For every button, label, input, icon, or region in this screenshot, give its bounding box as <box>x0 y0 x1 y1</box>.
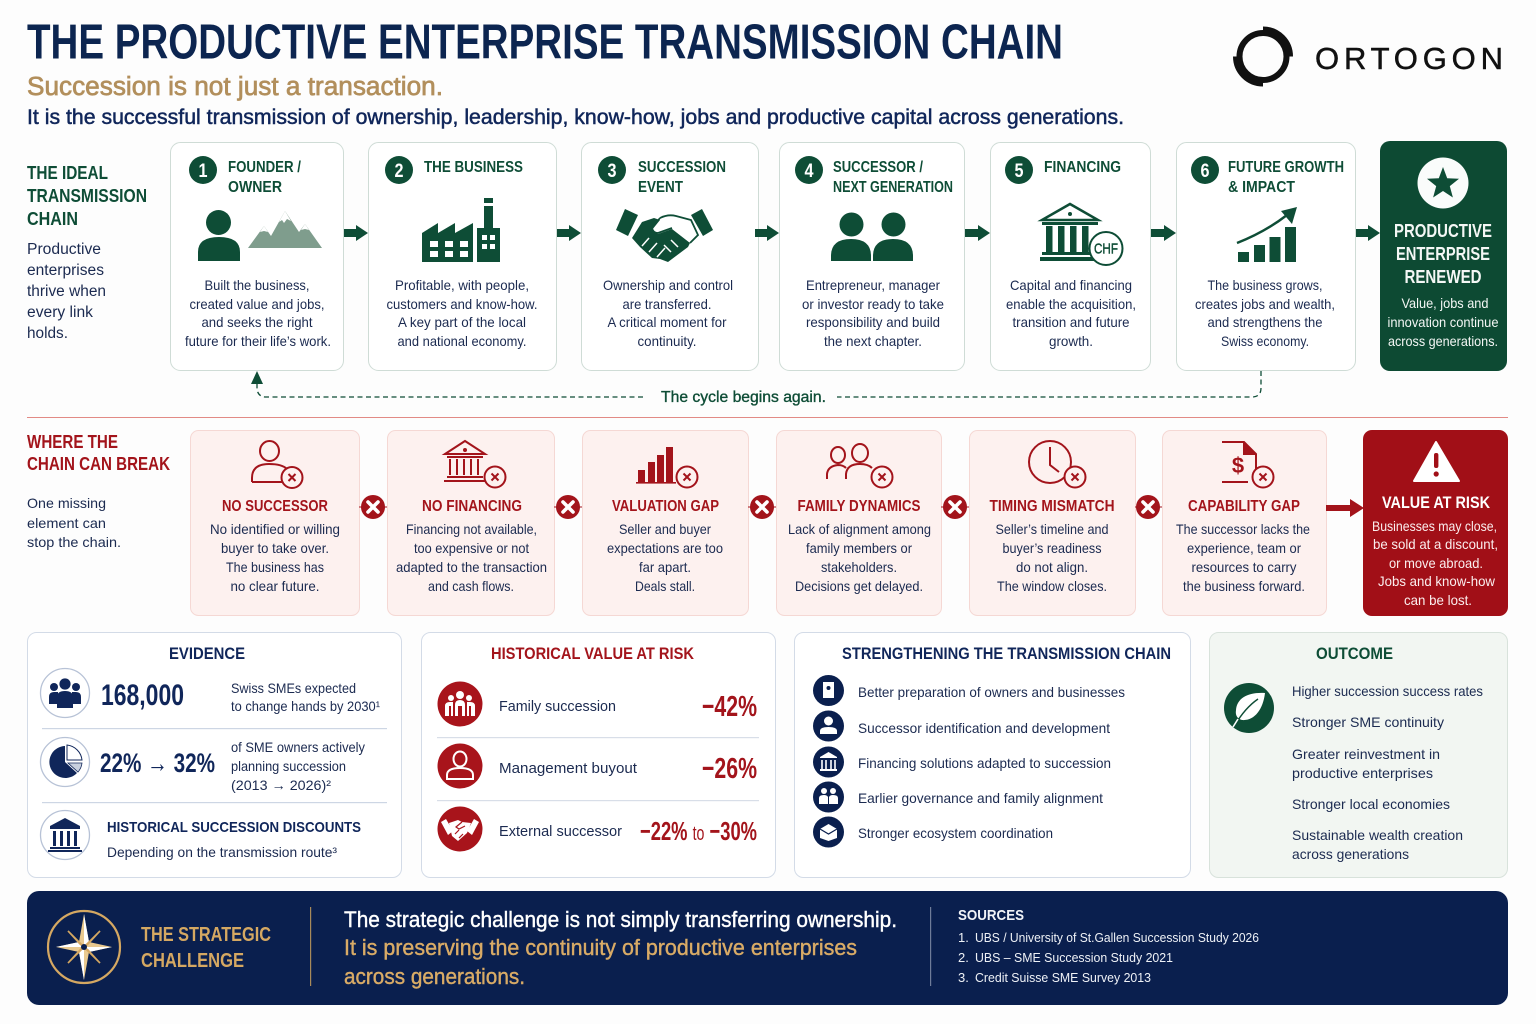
banner: strategic challenge <box>27 891 1508 1005</box>
icon: handshake <box>616 209 713 262</box>
section label: where the chain can break: CHAIN CAN BREAK <box>27 454 170 474</box>
subtitle: Succession is not just a transaction. <box>27 73 443 101</box>
break card 4: family dynamics: family members or <box>806 540 912 556</box>
icon: star badge <box>1418 158 1468 208</box>
section label: the ideal transmission chain: every link <box>27 304 93 321</box>
sources: UBS – SME Succession Study 2021 <box>975 950 1173 965</box>
arrow <box>557 225 581 241</box>
row: family succession: −42% <box>702 691 757 723</box>
list: outcomes: across generations <box>1292 846 1409 862</box>
panel: historical value at risk <box>422 632 776 878</box>
break card 6: capability gap: CAPABILITY GAP <box>1188 498 1300 515</box>
stat: 168,000 SMEs <box>101 679 380 714</box>
break card 4: family dynamics <box>776 430 942 616</box>
stat: 168,000 SMEs: to change hands by 2030¹ <box>231 698 380 714</box>
card: productive enterprise renewed: PRODUCTIVE <box>1394 221 1492 241</box>
break card 6: capability gap: The successor lacks the <box>1176 521 1310 537</box>
arrow <box>965 225 990 241</box>
card 1: founder / owner: FOUNDER / <box>228 159 302 176</box>
arrow <box>1151 225 1176 241</box>
card 2: the business <box>368 142 556 370</box>
break card 3: valuation gap <box>582 430 748 616</box>
sources: Credit Suisse SME Survey 2013 <box>975 970 1151 985</box>
break marker <box>748 495 776 519</box>
section label: the ideal transmission chain: CHAIN <box>27 209 78 229</box>
stat: 22 to 32 percent planning succession: planning succession <box>231 758 346 774</box>
card: productive enterprise renewed: innovation continue <box>1388 314 1499 330</box>
card 5: financing: transition and future <box>1012 314 1130 330</box>
card: productive enterprise renewed <box>1380 141 1507 371</box>
break card 1: no successor: No identified or willing <box>210 521 340 537</box>
section label: where the chain can break: stop the chain. <box>27 534 121 550</box>
list: outcomes: Sustainable wealth creation <box>1292 827 1463 843</box>
label: CHALLENGE <box>141 950 244 972</box>
cycle loop arrow <box>251 371 1261 406</box>
icon: family with cross <box>827 444 892 488</box>
card: value at risk: Jobs and know-how <box>1378 573 1496 589</box>
sources: 3. <box>958 970 969 985</box>
sources: 2. <box>958 950 969 965</box>
logo: Ortogon <box>1236 30 1503 83</box>
card 4: successor / next generation: the next chapter. <box>824 333 922 349</box>
section label: the ideal transmission chain: holds. <box>27 325 68 342</box>
icon: bank with cross <box>444 441 506 488</box>
card 6: future growth and impact: Swiss economy. <box>1221 333 1309 349</box>
break card 4: family dynamics: stakeholders. <box>821 559 897 575</box>
card 4: successor / next generation: NEXT GENERATION <box>833 179 953 196</box>
card: productive enterprise renewed: across generations. <box>1388 333 1498 349</box>
panel: strengthening the transmission chain <box>794 632 1190 878</box>
card 4: successor / next generation: Entrepreneur, manager <box>806 277 940 293</box>
icon: two successors <box>831 212 913 261</box>
break marker <box>554 495 582 519</box>
card: value at risk: VALUE AT RISK <box>1382 493 1491 512</box>
card 5: financing: growth. <box>1049 333 1093 349</box>
section label: where the chain can break: One missing <box>27 495 106 511</box>
sources: 1. <box>958 930 969 945</box>
icon: compass <box>48 911 120 983</box>
card 6: future growth and impact: and strengthens the <box>1208 314 1323 330</box>
tagline: It is the successful transmission of ownership, leadership, know-how, jobs and productive capital across generations. <box>27 106 1124 129</box>
stat: 168,000 SMEs: 168,000 <box>101 679 184 712</box>
item: earlier governance <box>813 782 1103 812</box>
stat: 22 to 32 percent planning succession: (2013 → 2026)² <box>231 777 331 793</box>
card 3: succession event: are transferred. <box>622 296 712 312</box>
panel: outcome <box>1210 632 1508 878</box>
card 3: succession event: 3 <box>608 161 616 182</box>
break card 3: valuation gap: Deals stall. <box>635 578 695 594</box>
label: THE STRATEGIC <box>141 924 271 946</box>
statement: across generations. <box>344 964 525 989</box>
card: value at risk: can be lost. <box>1404 592 1472 608</box>
text: historical succession discounts: HISTORICAL SUCCESSION DISCOUNTS <box>107 819 361 836</box>
item: successor identification <box>813 710 1110 742</box>
row: family succession: Family succession <box>499 698 616 715</box>
card 3: succession event <box>582 142 758 370</box>
card 4: successor / next generation: responsibility and build <box>806 314 940 330</box>
card 3: succession event: continuity. <box>638 333 696 349</box>
card 4: successor / next generation: SUCCESSOR / <box>833 159 924 176</box>
break card 5: timing mismatch: do not align. <box>1016 559 1088 575</box>
card 6: future growth and impact: FUTURE GROWTH <box>1228 159 1344 176</box>
section label: the ideal transmission chain: enterprises <box>27 262 104 279</box>
row: external successor <box>438 806 757 852</box>
icon: clock with cross <box>1029 441 1086 488</box>
card 3: succession event: SUCCESSION <box>638 159 726 176</box>
arrow <box>344 225 368 241</box>
card 2: the business: 2 <box>394 161 404 182</box>
arrow: to value at risk <box>1326 499 1364 517</box>
list: outcomes: Stronger SME continuity <box>1292 714 1444 730</box>
heading: OUTCOME <box>1316 644 1393 663</box>
row: management buyout: −26% <box>702 753 757 785</box>
card: productive enterprise renewed: RENEWED <box>1404 267 1482 287</box>
icon: document with cross <box>1222 442 1274 488</box>
item: stronger ecosystem <box>813 816 1053 848</box>
heading: HISTORICAL VALUE AT RISK <box>491 644 695 663</box>
row: management buyout <box>438 744 757 788</box>
break card 4: family dynamics: Lack of alignment among <box>788 521 931 537</box>
row: management buyout: Management buyout <box>499 760 638 777</box>
section label: the ideal transmission chain: Productive <box>27 241 101 258</box>
text: historical succession discounts: Depending on the transmission route³ <box>107 844 337 860</box>
card 5: financing: 5 <box>1014 161 1024 182</box>
icon: leaf <box>1224 683 1274 733</box>
break card 1: no successor <box>190 430 360 616</box>
list: outcomes: Higher succession success rates <box>1292 683 1483 699</box>
section label: the ideal transmission chain: THE IDEAL <box>27 163 108 183</box>
card 1: founder / owner: 1 <box>198 161 208 182</box>
icon: person with cross <box>252 441 302 488</box>
list: outcomes: Greater reinvestment in <box>1292 746 1440 762</box>
statement <box>344 907 897 989</box>
card: value at risk: be sold at a discount, <box>1373 536 1498 552</box>
break card 6: capability gap: the business forward. <box>1183 578 1305 594</box>
break marker <box>941 495 969 519</box>
statement: The strategic challenge is not simply transferring ownership. <box>344 907 897 932</box>
stat: 22 to 32 percent planning succession: of SME owners actively <box>231 739 365 755</box>
card 1: founder / owner: created value and jobs, <box>190 296 324 312</box>
card: productive enterprise renewed: ENTERPRISE <box>1396 244 1490 264</box>
break card 3: valuation gap: far apart. <box>639 559 691 575</box>
text: historical succession discounts <box>107 819 361 860</box>
icon: bank with CHF coin <box>1040 204 1122 265</box>
item: better preparation: Better preparation of owners and businesses <box>858 684 1125 700</box>
card 5: financing <box>990 142 1150 370</box>
card 1: founder / owner: and seeks the right <box>202 314 313 330</box>
break card 2: no financing: NO FINANCING <box>422 498 522 515</box>
break card 6: capability gap: resources to carry <box>1192 559 1296 575</box>
break card 2: no financing: and cash flows. <box>428 578 514 594</box>
section label: the ideal transmission chain: TRANSMISSION <box>27 186 147 206</box>
card: value at risk: Businesses may close, <box>1372 518 1497 534</box>
heading: EVIDENCE <box>169 644 245 663</box>
break card 5: timing mismatch: TIMING MISMATCH <box>990 498 1114 515</box>
break marker <box>359 495 387 519</box>
icon: warning triangle <box>1414 442 1459 481</box>
stat: 22 to 32 percent planning succession: 22% → 32% <box>100 748 215 778</box>
section label: where the chain can break: element can <box>27 515 106 531</box>
break card 2: no financing <box>388 430 554 616</box>
stat: 22 to 32 percent planning succession <box>100 739 365 793</box>
card: productive enterprise renewed: Value, jobs and <box>1402 295 1488 311</box>
icon: growth chart <box>1237 207 1297 262</box>
sources: UBS / University of St.Gallen Succession Study 2026 <box>975 930 1259 945</box>
card: value at risk: or move abroad. <box>1389 555 1483 571</box>
label <box>141 924 271 972</box>
break card 2: no financing: adapted to the transaction <box>396 559 547 575</box>
cycle loop arrow: The cycle begins again. <box>661 389 826 406</box>
break card 3: valuation gap: VALUATION GAP <box>612 498 719 515</box>
card 1: founder / owner: future for their life’s work. <box>185 333 331 349</box>
item: stronger ecosystem: Stronger ecosystem coordination <box>858 825 1053 841</box>
card 3: succession event: A critical moment for <box>608 314 727 330</box>
break card 2: no financing: Financing not available, <box>406 521 537 537</box>
statement: It is preserving the continuity of productive enterprises <box>344 935 857 960</box>
section label: where the chain can break: WHERE THE <box>27 432 118 452</box>
card: value at risk <box>1363 430 1508 616</box>
stat: 168,000 SMEs: Swiss SMEs expected <box>231 680 356 696</box>
break card 5: timing mismatch: The window closes. <box>997 578 1107 594</box>
row: family succession <box>438 682 757 726</box>
sources <box>958 907 1259 985</box>
card 3: succession event: EVENT <box>638 179 683 196</box>
arrow <box>1356 225 1380 241</box>
item: successor identification: Successor identification and development <box>858 720 1110 736</box>
card 2: the business: customers and know-how. <box>386 296 538 312</box>
sources: SOURCES <box>958 907 1024 924</box>
card 5: financing: Capital and financing <box>1010 277 1132 293</box>
break card 6: capability gap: experience, team or <box>1187 540 1301 556</box>
break card 1: no successor: NO SUCCESSOR <box>222 498 328 515</box>
card 4: successor / next generation <box>780 142 964 370</box>
list: outcomes: Stronger local economies <box>1292 796 1450 812</box>
break card 2: no financing: too expensive or not <box>414 540 529 556</box>
section label: the ideal transmission chain <box>27 163 147 342</box>
heading: STRENGTHENING THE TRANSMISSION CHAIN <box>842 644 1171 663</box>
card 5: financing: enable the acquisition, <box>1006 296 1136 312</box>
title: THE PRODUCTIVE ENTERPRISE TRANSMISSION CHAIN <box>27 16 1063 70</box>
card 2: the business: THE BUSINESS <box>424 159 523 176</box>
break card 1: no successor: buyer to take over. <box>221 540 329 556</box>
icon: bank <box>40 810 90 860</box>
card 2: the business: A key part of the local <box>398 314 526 330</box>
section label: where the chain can break <box>27 432 170 550</box>
icon: bars with cross <box>636 447 698 488</box>
card 4: successor / next generation: or investor ready to take <box>802 296 944 312</box>
break card 6: capability gap <box>1162 430 1326 616</box>
card 6: future growth and impact <box>1176 142 1356 370</box>
card 1: founder / owner: Built the business, <box>204 277 310 293</box>
card 2: the business: and national economy. <box>398 333 526 349</box>
item: financing solutions <box>813 746 1111 778</box>
icon: person and mountain <box>198 210 322 261</box>
icon: pie chart <box>40 738 90 786</box>
item: financing solutions: Financing solutions adapted to succession <box>858 755 1111 771</box>
list: outcomes: productive enterprises <box>1292 765 1433 781</box>
card 1: founder / owner: OWNER <box>228 179 282 196</box>
break card 5: timing mismatch <box>970 430 1136 616</box>
break marker <box>1135 495 1163 519</box>
row: external successor: −22% to −30% <box>640 816 757 846</box>
row: external successor: External successor <box>499 823 622 840</box>
logo: Ortogon: ORTOGON <box>1315 41 1503 76</box>
break card 1: no successor: no clear future. <box>230 578 320 594</box>
card 6: future growth and impact: & IMPACT <box>1228 179 1295 196</box>
break card 5: timing mismatch: buyer’s readiness <box>1002 540 1102 556</box>
card 6: future growth and impact: The business grows, <box>1208 277 1322 293</box>
card 5: financing: FINANCING <box>1044 159 1121 176</box>
break card 3: valuation gap: Seller and buyer <box>619 521 711 537</box>
card 4: successor / next generation: 4 <box>804 161 814 182</box>
list: outcomes <box>1292 683 1483 862</box>
icon: document with cross: $ <box>1232 453 1244 478</box>
panel: evidence <box>28 632 402 878</box>
card 3: succession event: Ownership and control <box>603 277 733 293</box>
card 6: future growth and impact: 6 <box>1200 161 1210 182</box>
item: earlier governance: Earlier governance and family alignment <box>858 790 1103 806</box>
break card 3: valuation gap: expectations are too <box>607 540 723 556</box>
icon: people <box>40 668 90 718</box>
break card 4: family dynamics: FAMILY DYNAMICS <box>798 498 920 515</box>
card 1: founder / owner <box>170 142 344 370</box>
break card 5: timing mismatch: Seller’s timeline and <box>996 521 1108 537</box>
break card 1: no successor: The business has <box>226 559 324 575</box>
card 6: future growth and impact: creates jobs and wealth, <box>1195 296 1335 312</box>
icon: factory <box>422 198 500 262</box>
arrow <box>755 225 779 241</box>
section label: the ideal transmission chain: thrive when <box>27 283 106 300</box>
card 2: the business: Profitable, with people, <box>395 277 529 293</box>
break card 4: family dynamics: Decisions get delayed. <box>795 578 923 594</box>
icon: bank with CHF coin: CHF <box>1094 242 1118 258</box>
item: better preparation <box>813 675 1125 706</box>
